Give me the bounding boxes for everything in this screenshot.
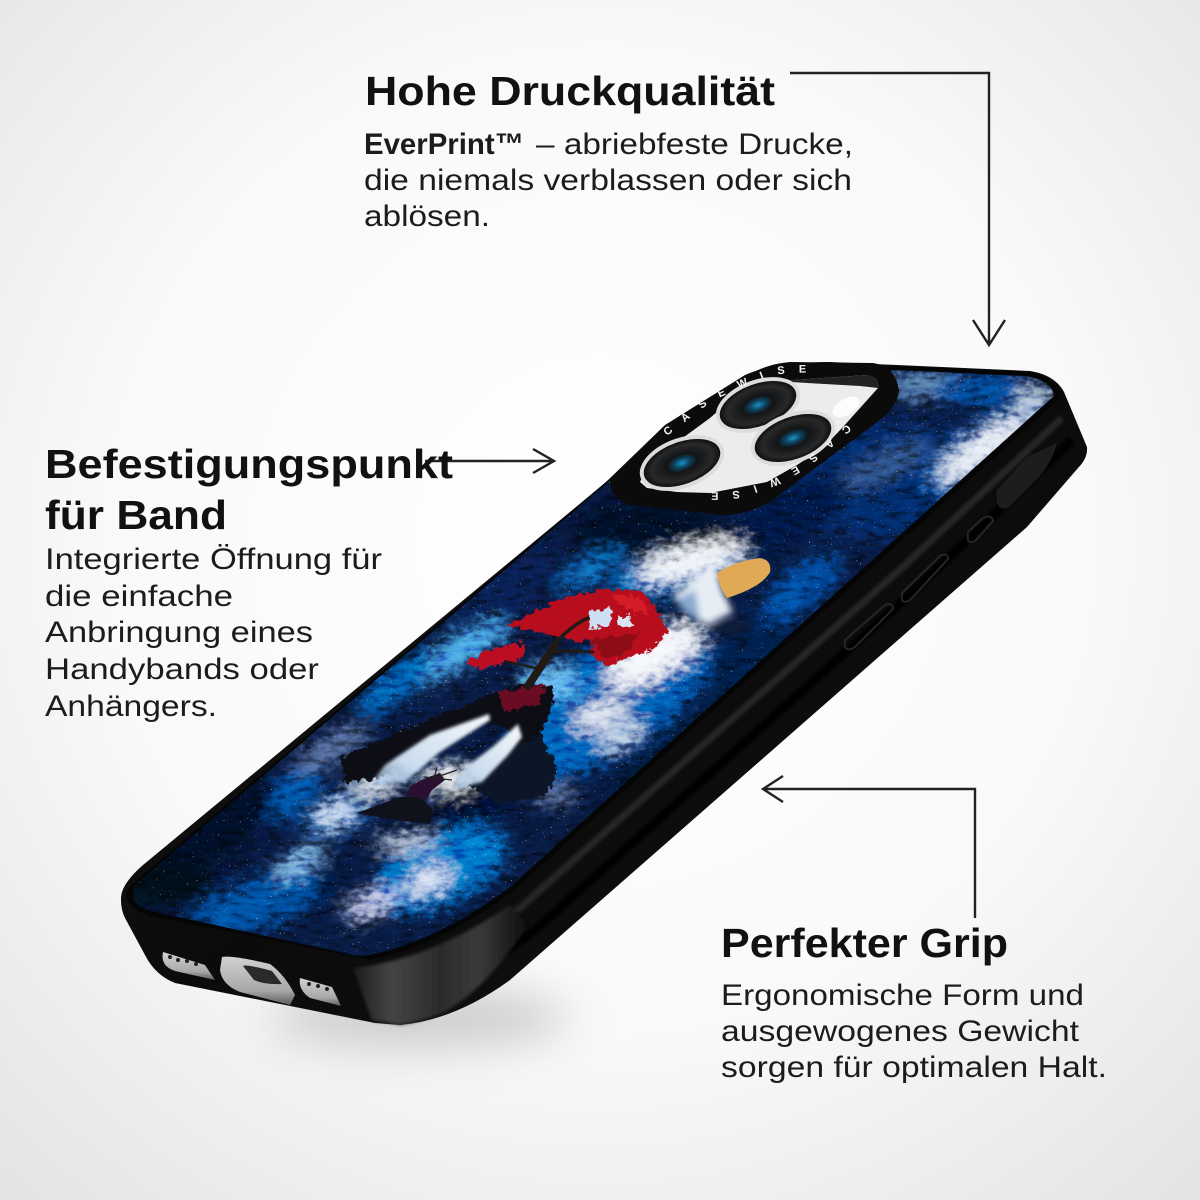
text block: grip: sorgen für optimalen Halt. (721, 1051, 1107, 1084)
inner top shadow (750, 375, 878, 392)
case body silhouette (121, 362, 1087, 1025)
brush texture overlay (134, 370, 1054, 956)
text block: strap point: die einfache (45, 580, 233, 613)
USB slot (243, 966, 282, 984)
lens top (708, 366, 808, 444)
volume and power buttons (845, 517, 993, 649)
lower cliff mass (470, 735, 558, 805)
phone case (121, 362, 1087, 1025)
text block: print quality: EverPrint™ (364, 128, 524, 161)
text block: strap point: Anhängers. (45, 690, 217, 723)
speaker holes (168, 955, 198, 966)
text block: print quality (364, 128, 853, 233)
text block: strap point: Integrierte Öffnung für (45, 543, 382, 576)
swords (424, 767, 457, 782)
clouds and sky (115, 372, 1054, 951)
heading: print quality: Hohe Druckqualität (365, 68, 775, 114)
red tree (465, 590, 668, 686)
rock (357, 797, 433, 824)
bottom ports (162, 952, 341, 1006)
text block: print quality: die niemals verblassen oder sich (364, 164, 852, 197)
brand text: CASEWISE (664, 365, 806, 434)
text block: print quality: – abriebfeste Drucke, (536, 128, 853, 161)
heading: strap point (45, 441, 453, 538)
waterfalls (370, 714, 522, 790)
arrow: grip (763, 776, 975, 918)
foliage (465, 590, 668, 668)
right speaker (300, 978, 341, 1006)
arrow: strap point (425, 449, 554, 473)
bump inner (640, 375, 878, 493)
bezel rim (127, 366, 1060, 960)
heading: grip: Perfekter Grip (721, 920, 1008, 966)
text block: grip: Ergonomische Form und (721, 979, 1084, 1012)
lens right (743, 399, 843, 477)
trunk (505, 618, 593, 686)
text block: strap point: Handybands oder (45, 653, 319, 686)
text block: print quality: ablösen. (364, 200, 490, 233)
heading: strap point: Befestigungspunkt (45, 441, 453, 487)
upper cliffs (340, 683, 553, 783)
lens left (632, 424, 732, 502)
curved corner reflection (353, 905, 528, 1025)
figure (405, 773, 445, 800)
bump frame (610, 362, 899, 515)
flash (829, 393, 863, 421)
text block: grip (721, 979, 1107, 1084)
brand text lower: CASEWISE (711, 426, 850, 500)
samurai on rock (357, 767, 457, 824)
phone shadow (270, 988, 570, 1048)
text block: strap point (45, 543, 382, 723)
side grip highlight (400, 418, 1062, 968)
USB port (220, 957, 295, 1005)
side grip dark channel (405, 440, 1072, 992)
speaker holes (307, 982, 329, 991)
arrow: print quality (790, 73, 1005, 345)
mute switch (996, 443, 1057, 509)
painted artwork (133, 370, 1054, 956)
text block: strap point: Anbringung eines (45, 616, 313, 649)
camera bump (610, 362, 899, 515)
mountain (673, 558, 760, 636)
gold flecks (134, 370, 1048, 955)
text block: grip: ausgewogenes Gewicht (721, 1015, 1080, 1048)
base navy (134, 370, 1054, 956)
heading: strap point: für Band (45, 492, 227, 538)
moon (717, 558, 770, 598)
left speaker (162, 952, 215, 980)
